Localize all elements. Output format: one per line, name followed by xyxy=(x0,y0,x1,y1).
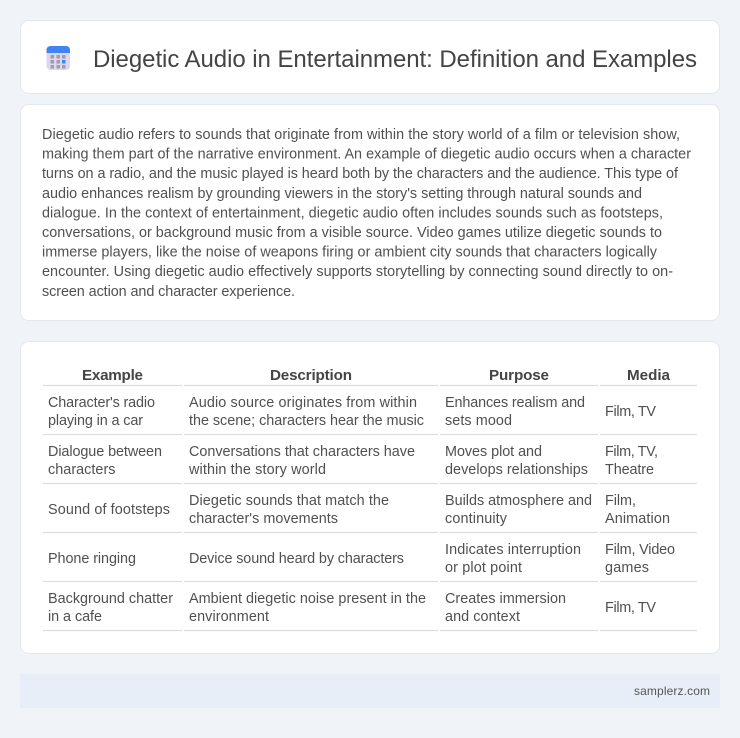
table row: phone: games xyxy=(605,560,649,576)
panel: header card xyxy=(20,20,720,94)
table row: radio: Character's radio xyxy=(48,395,155,411)
table row: footsteps: Film, xyxy=(605,493,636,509)
text block: definition paragraph: screen action and character experience. xyxy=(42,284,295,300)
table row: footsteps: Sound of footsteps xyxy=(48,502,170,518)
table row: dialogue: characters xyxy=(48,462,116,478)
footer credit: samplerz.com xyxy=(634,684,710,698)
text block: definition paragraph: Diegetic audio refers to sounds that originate from within the story world of a film or television show, xyxy=(42,127,680,143)
table row: footsteps xyxy=(48,493,670,527)
table header row: Description xyxy=(270,367,352,384)
table row: phone: Indicates interruption xyxy=(445,542,581,558)
title: Diegetic Audio in Entertainment: Definition and Examples xyxy=(93,46,697,73)
table row: footsteps: Builds atmosphere and xyxy=(445,493,592,509)
table row: phone: Phone ringing xyxy=(48,551,136,567)
table header row: Example xyxy=(82,367,143,384)
table row: phone xyxy=(48,542,675,576)
table row: radio: sets mood xyxy=(445,413,512,429)
table row: footsteps: character's movements xyxy=(189,511,338,527)
icon: calendar xyxy=(46,46,70,70)
table row: phone: Device sound heard by characters xyxy=(189,551,404,567)
text block: definition paragraph: encounter. Using diegetic audio effectively supports storytelling by connecting sound directly to on- xyxy=(42,264,673,280)
table header row: Media xyxy=(627,367,671,384)
text block: definition paragraph: immerse players, like the noise of weapons firing or ambient city sounds that characters logically xyxy=(42,245,658,261)
table row: chatter: and context xyxy=(445,609,520,625)
table row: dialogue: Moves plot and xyxy=(445,444,542,460)
text block: definition paragraph: audio enhances realism by grounding viewers in the story's setting through natural sounds and xyxy=(42,186,642,202)
table row: footsteps: continuity xyxy=(445,511,508,527)
table row: dialogue: Film, TV, xyxy=(605,444,658,460)
table row: phone: Film, Video xyxy=(605,542,675,558)
footer bar xyxy=(20,674,720,708)
table row: dialogue: Conversations that characters have xyxy=(189,444,415,460)
table row: chatter: Ambient diegetic noise present in the xyxy=(189,591,426,607)
table row: radio: Audio source originates from within xyxy=(189,395,417,411)
table row: footsteps: Diegetic sounds that match the xyxy=(189,493,389,509)
panel: table card xyxy=(20,342,720,654)
text block: definition paragraph: dialogue. In the context of entertainment, diegetic audio often includes sounds such as footsteps, xyxy=(42,205,663,221)
table row: dialogue: develops relationships xyxy=(445,462,588,478)
table row: radio xyxy=(48,395,656,429)
text block: definition paragraph: turns on a radio, and the music played is heard both by the characters and the audience. This type of xyxy=(42,166,679,182)
table row: dialogue: Dialogue between xyxy=(48,444,162,460)
panel: definition card xyxy=(20,104,720,320)
table row: radio: the scene; characters hear the music xyxy=(189,413,424,429)
table row: chatter: Background chatter xyxy=(48,591,173,607)
table row: phone: or plot point xyxy=(445,560,522,576)
table row: chatter: Creates immersion xyxy=(445,591,566,607)
table header row: Purpose xyxy=(489,367,549,384)
table row: dialogue: within the story world xyxy=(188,462,326,478)
table row: dialogue: Theatre xyxy=(605,462,654,478)
table row: dialogue xyxy=(48,444,658,478)
text block: definition paragraph: making them part of the narrative environment. An example of diegetic audio occurs when a character xyxy=(42,147,691,163)
table row: chatter: Film, TV xyxy=(605,600,656,616)
table row: chatter: in a cafe xyxy=(48,609,102,625)
table row: radio: playing in a car xyxy=(48,413,143,429)
table header row xyxy=(82,367,671,384)
text block: definition paragraph: conversations, or background music from a visible source. Video games utilize diegetic sounds to xyxy=(42,225,662,241)
table row: chatter xyxy=(48,591,656,625)
table row: radio: Film, TV xyxy=(605,404,656,420)
text block: definition paragraph xyxy=(42,127,691,300)
table row: radio: Enhances realism and xyxy=(445,395,585,411)
table row: chatter: environment xyxy=(189,609,269,625)
table row: footsteps: Animation xyxy=(605,511,670,527)
